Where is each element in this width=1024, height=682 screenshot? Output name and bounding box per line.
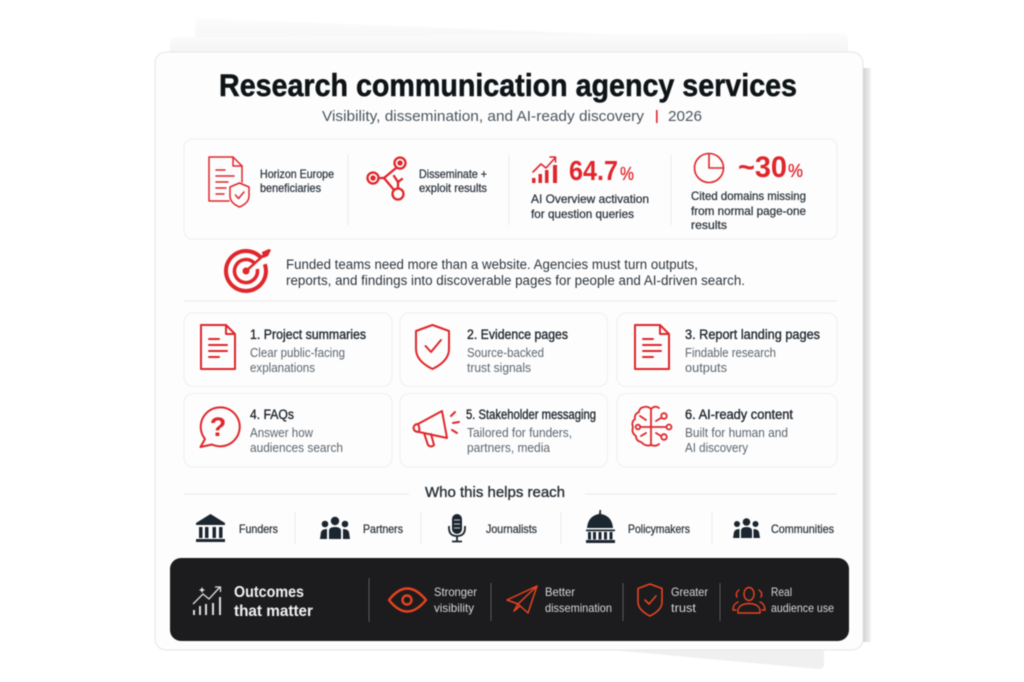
stat: 64.7%: for question queries [531,207,634,221]
text: Horizon Europe beneficiaries [260,167,334,195]
card 6: AI-ready content [617,394,837,467]
icon: rising bar chart [532,157,557,183]
text: Disseminate + exploit results: Disseminate + [419,167,487,181]
outcome: Better dissemination: dissemination [545,601,612,615]
panel: key stats [184,139,837,239]
card 3: Report landing pages: outputs [685,361,727,375]
card 4: FAQs: Answer how [250,426,314,440]
outcome: Real audience use [733,585,834,615]
icon: partners group [320,517,350,539]
main card [155,52,863,650]
stat: ~30%: from normal page-one [691,204,806,218]
icon: megaphone [414,411,459,446]
label: Policymakers: Policymakers [628,522,690,536]
stat: 64.7% [531,155,649,221]
icon: shield with check [416,325,449,369]
stat: ~30%: % [788,161,803,181]
outcome: Stronger visibility [389,585,477,615]
label: Journalists: Journalists [486,522,537,536]
card 4: FAQs: 4. FAQs [250,407,294,422]
intro statement: reports, and findings into discoverable pages for people and AI-driven search. [286,273,745,288]
card 6: AI-ready content: AI discovery [685,441,749,455]
card 2: Evidence pages [400,313,608,386]
stat: ~30%: results [691,218,727,232]
outcome: Better dissemination [507,585,612,615]
card 2: Evidence pages: Source-backed [467,346,544,360]
icon: funders bank [196,514,225,542]
icon: audience people [733,588,765,613]
card 6: AI-ready content: 6. AI-ready content [685,407,793,422]
stat: ~30%: Cited domains missing [691,189,806,203]
card 2: Evidence pages: 2. Evidence pages [467,327,568,342]
stat: 64.7%: % [620,164,634,184]
icon: document [201,325,235,369]
icon: paper plane [507,586,537,613]
card 1: Project summaries: explanations [250,361,315,375]
outcome: Greater trust: trust [671,601,697,615]
stat: 64.7%: AI Overview activation [531,192,649,206]
outcome: Better dissemination: Better [545,585,575,599]
label: Communities: Communities [771,522,834,536]
card 5: Stakeholder messaging: 5. Stakeholder messaging [466,407,596,422]
icon: AI brain [632,407,672,446]
subtitle: 2026 [668,108,702,125]
icon: document with shield [209,157,249,207]
icon: target with arrow [226,249,271,291]
card 5: Stakeholder messaging [400,394,608,467]
text: Disseminate + exploit results: exploit results [419,181,487,195]
icon: communities group [733,518,760,538]
heading: Who this helps reach: Who this helps reach [425,485,565,501]
card 6: AI-ready content: Built for human and [685,426,788,440]
outcome: Real audience use: audience use [771,601,834,615]
icon: question bubble: ? [210,412,226,442]
title: Research communication agency services [219,67,797,103]
heading: Outcomes that matter [234,584,313,620]
card 4: FAQs [184,394,392,467]
outcome: Greater trust: Greater [671,585,708,599]
subtitle: Visibility, dissemination, and AI-ready discovery [322,108,645,125]
outcome: Stronger visibility: visibility [434,601,474,615]
stat: ~30% [691,151,806,232]
card 3: Report landing pages [617,313,837,386]
card 3: Report landing pages: Findable research [685,346,776,360]
card 1: Project summaries [184,313,392,386]
text: Horizon Europe beneficiaries: Horizon Europe [260,167,334,181]
card 1: Project summaries: 1. Project summaries [250,327,366,342]
intro statement: Funded teams need more than a website. Agencies must turn outputs, [286,257,698,272]
stat: ~30%: ~30 [738,151,787,184]
card 5: Stakeholder messaging: Tailored for funders, [467,426,572,440]
card 4: FAQs: audiences search [250,441,343,455]
icon: shield check [638,584,662,616]
text: Horizon Europe beneficiaries: beneficiaries [260,181,321,195]
heading: Outcomes that matter: Outcomes [234,584,304,601]
icon: microphone [449,514,465,542]
heading: Outcomes that matter: that matter [234,603,313,620]
icon: capitol building [586,510,615,543]
audience row [196,510,834,544]
intro statement [286,257,745,288]
outcome: Greater trust [638,584,708,616]
card 2: Evidence pages: trust signals [467,361,531,375]
icon: question bubble [200,407,240,447]
stacked paper sheets behind card [170,18,871,669]
outcome: Real audience use: Real [771,585,792,599]
stat: 64.7%: 64.7 [569,155,618,186]
card 5: Stakeholder messaging: partners, media [467,441,550,455]
icon: eye [389,588,426,612]
label: Partners: Partners [363,522,403,536]
icon: report document [635,325,669,369]
card 3: Report landing pages: 3. Report landing pages [685,327,820,342]
icon: pie chart [694,154,724,182]
card 1: Project summaries: Clear public-facing [250,346,345,360]
label: Funders: Funders [239,522,278,536]
icon: network nodes [368,158,406,200]
panel: outcomes bar [170,558,849,641]
outcome: Stronger visibility: Stronger [434,585,477,599]
text: Disseminate + exploit results [419,167,487,195]
icon: growth chart [193,587,220,615]
